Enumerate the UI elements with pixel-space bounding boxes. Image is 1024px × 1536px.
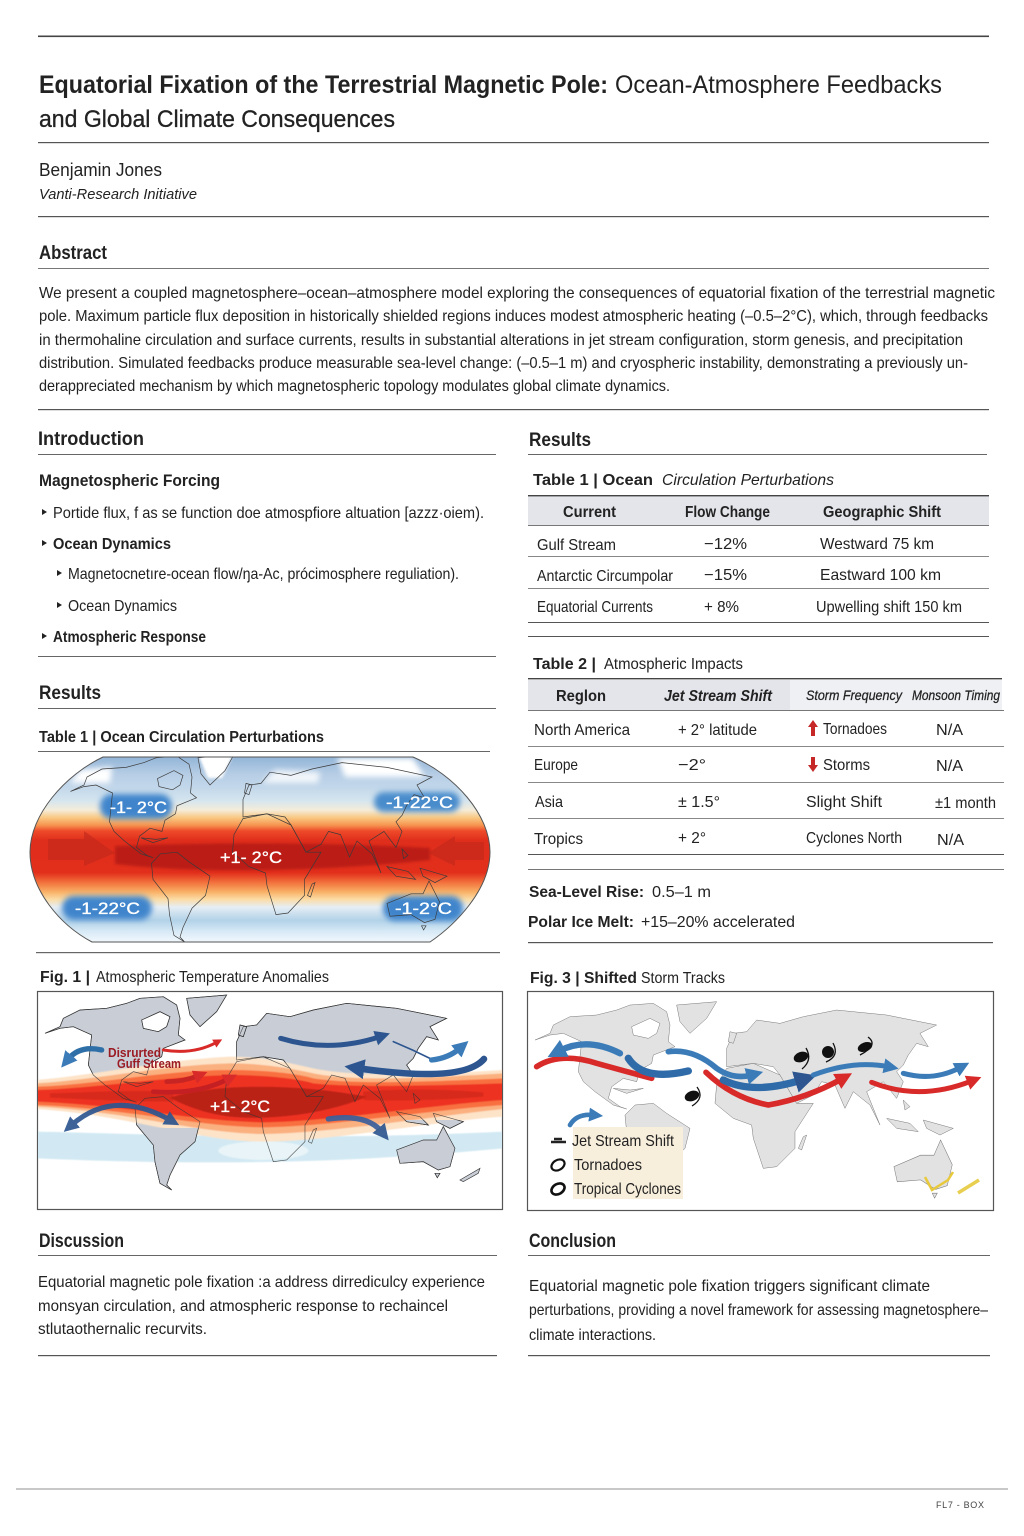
panel: introduction list: Atmospheric Response — [53, 629, 206, 646]
table 1: ocean circulation perturbations: Eastward 100 km — [820, 567, 941, 584]
table 2: atmospheric impacts: Jet Stream Shift — [664, 688, 773, 705]
chart: global temperature anomaly map: -1-2°C — [395, 899, 452, 918]
title: and Global Climate Consequences — [39, 106, 395, 133]
panel: introduction list: Magnetospheric Forcing — [39, 471, 220, 490]
table 2: atmospheric impacts: + 2° latitude — [678, 722, 757, 739]
conclusion heading: Conclusion — [529, 1231, 616, 1252]
table 2: atmospheric impacts: ±1 month — [935, 795, 996, 812]
abstract text: We present a coupled magnetosphere–ocean–atmosphere model exploring the consequences of equatorial fixation of the terrestrial magnetic — [39, 285, 995, 302]
figure 1: atmospheric temperature map — [37, 992, 503, 1210]
title — [39, 71, 942, 133]
table 2: atmospheric impacts: Storms — [823, 757, 870, 774]
introduction heading: Introduction — [38, 429, 144, 450]
table 2: atmospheric impacts: Asia — [535, 794, 563, 811]
conclusion text — [529, 1278, 988, 1344]
table 2: atmospheric impacts: Cyclones North — [806, 830, 902, 847]
table 2 caption: Table 2 | — [533, 656, 596, 673]
legend: Tropical Cyclones — [574, 1181, 681, 1198]
table 2: atmospheric impacts: N/A — [937, 832, 964, 849]
table 2: atmospheric impacts: Slight Shift — [806, 794, 883, 811]
figure 3 caption: Storm Tracks — [641, 970, 725, 987]
table 2: atmospheric impacts — [528, 678, 1004, 855]
key metrics: Polar Ice Melt: — [528, 914, 634, 931]
cyclone icons — [684, 1037, 873, 1106]
legend shade — [573, 1127, 683, 1199]
table 1: ocean circulation perturbations: Upwelling shift 150 km — [816, 599, 962, 616]
table 1: ocean circulation perturbations: Westward 75 km — [820, 536, 934, 553]
key metrics — [528, 884, 795, 931]
abstract text: distribution. Simulated feedbacks produce measurable sea-level change: (–0.5–1 m) and cryospheric instability, demonstrating a previously un- — [39, 355, 968, 372]
table 1: ocean circulation perturbations: Equatorial Currents — [537, 599, 653, 616]
table 2: atmospheric impacts: −2° — [678, 757, 706, 774]
abstract text: in thermohaline circulation and surface currents, results in substantial alterations in jet stream configuration, storm genesis, and precipitation — [39, 332, 963, 349]
jet stream arrows — [537, 1044, 972, 1125]
chart: global temperature anomaly map — [28, 755, 493, 945]
results heading right: Results — [529, 430, 591, 451]
chart: global temperature anomaly map: -1-22°C — [386, 793, 453, 812]
panel: introduction list: Portide flux, f as se function doe atmospfiore altuation [azzz·oiem). — [53, 505, 484, 522]
table 2: atmospheric impacts: N/A — [936, 722, 963, 739]
table 2: atmospheric impacts: Storm Frequency — [806, 687, 903, 703]
author block: Vanti-Research Initiative — [39, 186, 197, 203]
table 2: atmospheric impacts: Monsoon Timing — [912, 687, 1000, 703]
table 2: atmospheric impacts: Tropics — [534, 831, 583, 848]
table 1: ocean circulation perturbations: Geographic Shift — [823, 504, 942, 521]
discussion heading: Discussion — [39, 1231, 124, 1252]
header rule — [38, 36, 989, 37]
table 2 caption — [533, 656, 743, 673]
table 1 caption: Table 1 | Ocean — [533, 472, 653, 489]
table 2: atmospheric impacts: + 2° — [678, 830, 706, 847]
panel: introduction list: Ocean Dynamics — [53, 536, 171, 553]
chart: global temperature anomaly map: +1- 2°C — [220, 848, 282, 867]
discussion text: monsyan circulation, and atmospheric response to rechaincel — [38, 1298, 448, 1315]
panel: introduction list — [39, 471, 484, 646]
legend — [549, 1133, 681, 1198]
figure 1 caption: Atmospheric Temperature Anomalies — [96, 969, 329, 986]
table 1: ocean circulation perturbations: Gulf Stream — [537, 537, 616, 554]
conclusion text: Equatorial magnetic pole fixation triggers significant climate — [529, 1278, 930, 1295]
chart: global temperature anomaly map: -1- 2°C — [110, 798, 167, 817]
figure 1: atmospheric temperature map: Disrurted — [108, 1045, 161, 1060]
table 2: atmospheric impacts: Tornadoes — [823, 721, 887, 738]
panel: introduction list: Ocean Dynamics — [68, 598, 177, 615]
results heading left: Results — [39, 683, 101, 704]
title: Equatorial Fixation of the Terrestrial Magnetic Pole: — [39, 71, 608, 99]
arrows — [68, 1037, 484, 1132]
figure 3 caption — [530, 970, 725, 987]
figure 3: shifted storm tracks map — [528, 992, 994, 1210]
table 1: ocean circulation perturbations: Current — [563, 504, 617, 521]
conclusion text: climate interactions. — [529, 1327, 656, 1344]
key metrics: 0.5–1 m — [652, 884, 711, 901]
table 2: atmospheric impacts: ± 1.5° — [678, 794, 720, 811]
discussion text — [38, 1274, 485, 1338]
table 1: ocean circulation perturbations: + 8% — [704, 599, 739, 616]
discussion text: Equatorial magnetic pole fixation :a address dirrediculcy experience — [38, 1274, 485, 1291]
discussion text: stlutaothernalic recurvits. — [38, 1321, 207, 1338]
figure 1: atmospheric temperature map: Guff Stream — [117, 1056, 181, 1071]
key metrics: Sea-Level Rise: — [529, 884, 644, 901]
legend: Tornadoes — [574, 1157, 642, 1174]
author block — [39, 160, 197, 203]
abstract heading: Abstract — [39, 243, 108, 264]
table 1: ocean circulation perturbations — [528, 495, 989, 637]
temperature bands — [37, 1057, 503, 1162]
table 2: atmospheric impacts: Reglon — [556, 688, 606, 705]
table 2: atmospheric impacts: N/A — [936, 758, 963, 775]
table caption left: Table 1 | Ocean Circulation Perturbations — [39, 729, 324, 746]
figure 1: atmospheric temperature map: +1- 2°C — [210, 1097, 270, 1116]
table 1 caption — [533, 472, 834, 489]
table 2 caption: Atmospheric Impacts — [604, 656, 743, 673]
legend: Jet Stream Shift — [572, 1133, 674, 1150]
table 1: ocean circulation perturbations: −12% — [704, 536, 747, 553]
table 1: ocean circulation perturbations: Flow Change — [685, 504, 770, 521]
chart: global temperature anomaly map: -1-22°C — [75, 899, 140, 918]
table 2: atmospheric impacts: North America — [534, 722, 630, 739]
table 2: atmospheric impacts: Europe — [534, 757, 578, 774]
table 1 caption: Circulation Perturbations — [662, 472, 834, 489]
abstract text — [39, 285, 995, 395]
southern land over bands — [138, 1120, 464, 1190]
figure 1 caption: Fig. 1 | — [40, 969, 90, 986]
author block: Benjamin Jones — [39, 160, 162, 180]
table 1: ocean circulation perturbations: Antarctic Circumpolar — [537, 568, 674, 585]
table 1: ocean circulation perturbations: −15% — [704, 567, 747, 584]
yellow coast marks — [925, 1172, 953, 1190]
figure 3 caption: Fig. 3 | Shifted — [530, 970, 637, 987]
title: Ocean-Atmosphere Feedbacks — [615, 71, 942, 99]
footer label: FL7 - BOX — [936, 1500, 984, 1510]
key metrics: +15–20% accelerated — [641, 914, 795, 931]
panel: introduction list: Magnetocnetıre-ocean flow/ŋa-Ac, prócimosphere reguliation). — [68, 566, 459, 583]
abstract text: derappreciated mechanism by which magnetospheric topology modulates global climate dynamics. — [39, 378, 670, 395]
